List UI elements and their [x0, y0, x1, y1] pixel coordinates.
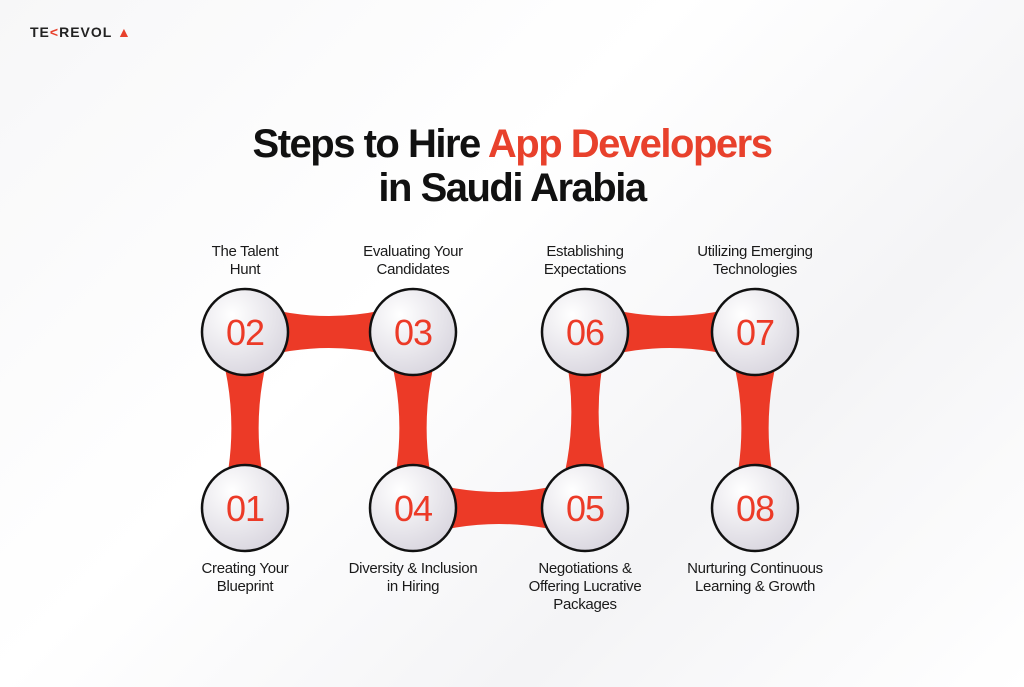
- title: in Saudi Arabia: [378, 166, 646, 210]
- title: Steps to Hire App Developers: [253, 122, 771, 166]
- label 08: Nurturing Continuous: [687, 560, 823, 577]
- title: [253, 122, 772, 210]
- label 04: in Hiring: [387, 578, 439, 595]
- label 05: Negotiations &: [538, 560, 632, 577]
- numbers: 08: [736, 488, 774, 529]
- numbers: 06: [566, 312, 604, 353]
- label 06: Expectations: [544, 261, 626, 278]
- label 01: Creating Your: [201, 560, 288, 577]
- label 03: [363, 243, 463, 278]
- label 07: Utilizing Emerging: [697, 243, 813, 260]
- label 08: Learning & Growth: [695, 578, 815, 595]
- numbers: [226, 312, 774, 529]
- label 05: Offering Lucrative: [529, 578, 641, 595]
- label 01: [201, 560, 288, 595]
- numbers: 07: [736, 312, 774, 353]
- numbers: 05: [566, 488, 604, 529]
- label 03: Evaluating Your: [363, 243, 463, 260]
- numbers: 03: [394, 312, 432, 353]
- label 06: [544, 243, 626, 278]
- label 04: Diversity & Inclusion: [349, 560, 477, 577]
- label 03: Candidates: [377, 261, 449, 278]
- label 02: Hunt: [230, 261, 260, 278]
- numbers: 04: [394, 488, 432, 529]
- circles: [202, 289, 798, 551]
- label 01: Blueprint: [217, 578, 273, 595]
- label 06: Establishing: [546, 243, 624, 260]
- logo: TE<REVOL ▲: [30, 24, 132, 40]
- label 07: Technologies: [713, 261, 797, 278]
- label 07: [697, 243, 813, 278]
- connectors: [215, 302, 785, 538]
- label 04: [349, 560, 477, 595]
- label 05: Packages: [553, 596, 617, 613]
- label 02: [212, 243, 279, 278]
- numbers: 01: [226, 488, 264, 529]
- numbers: 02: [226, 312, 264, 353]
- label 08: [687, 560, 823, 595]
- label 02: The Talent: [212, 243, 278, 260]
- label 05: [529, 560, 642, 613]
